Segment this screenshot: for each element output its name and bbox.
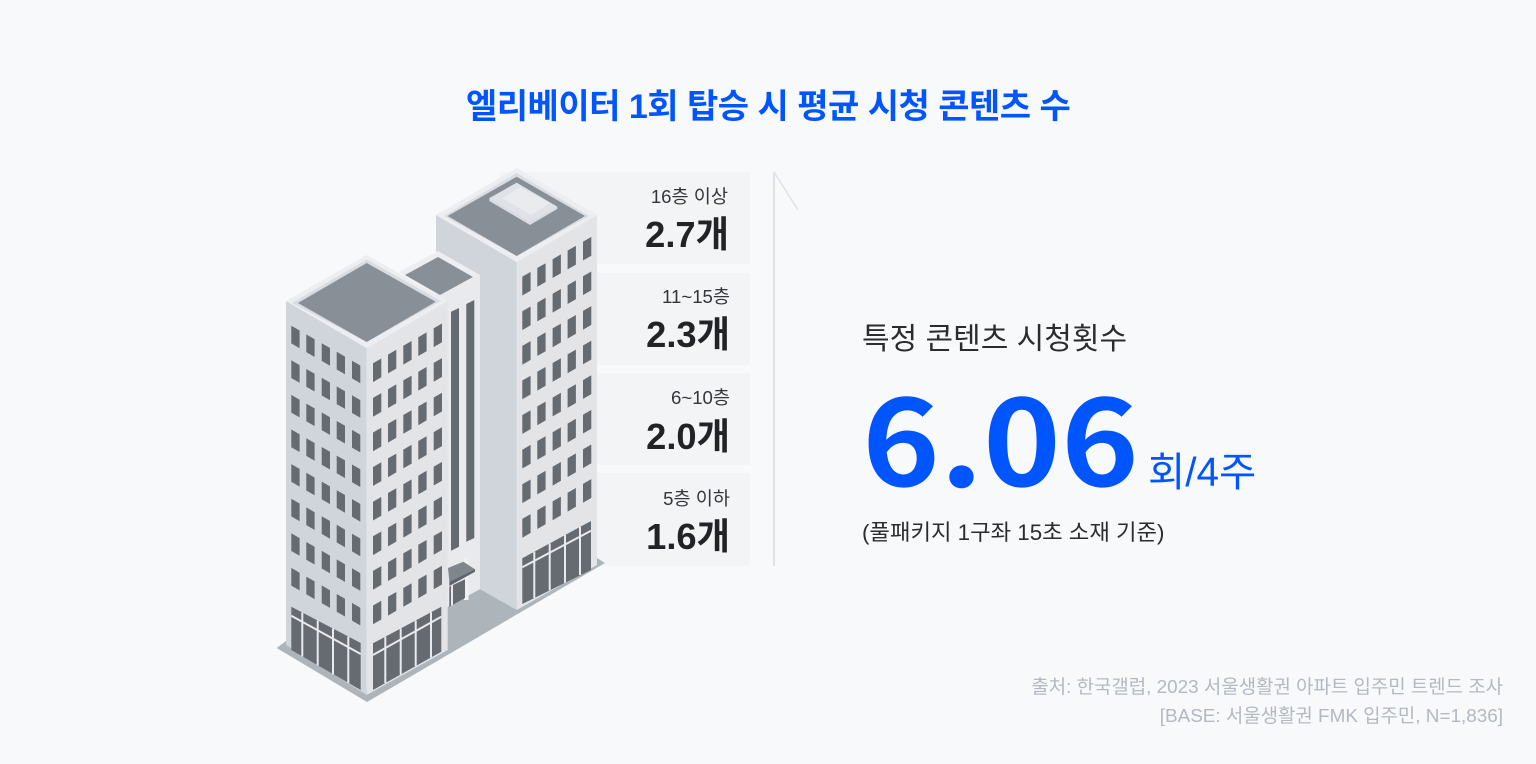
front building: [286, 255, 448, 695]
tower windows: [522, 237, 591, 538]
card value: 2.0개: 2.0개: [646, 416, 730, 457]
entrance canopy: [448, 558, 475, 607]
title: 엘리베이터 1회 탑승 시 평균 시청 콘텐츠 수: [466, 88, 1070, 126]
left storefront: [291, 607, 361, 690]
metric value: 6.06: [862, 348, 1139, 520]
card text: 5층 이하: 5층 이하: [663, 488, 730, 509]
card: 5층 이하: [500, 473, 750, 566]
connecting section: [399, 251, 480, 607]
rooftop unit: [489, 183, 557, 225]
right face windows: [373, 324, 442, 624]
ground: [277, 558, 605, 702]
metric note: (풀패키지 1구좌 15초 소재 기준): [862, 520, 1164, 545]
left face windows: [291, 326, 360, 625]
card: 6~10층: [500, 373, 750, 465]
card value: 2.3개: 2.3개: [646, 314, 730, 355]
card text: 6~10층: 6~10층: [671, 387, 730, 408]
vertical windows: [451, 300, 474, 551]
card value: 1.6개: 1.6개: [646, 516, 730, 557]
card: 16층 이상: [500, 172, 750, 264]
tower storefront: [522, 521, 591, 604]
metric label: 특정 콘텐츠 시청횟수: [862, 323, 1127, 356]
card: 11~15층: [500, 273, 750, 365]
source line 1: 출처: 한국갤럽, 2023 서울생활권 아파트 입주민 트렌드 조사: [1031, 677, 1503, 698]
right storefront: [373, 607, 441, 690]
card text: 16층 이상: 16층 이상: [651, 186, 728, 207]
tower: [436, 168, 597, 610]
courtyard: [448, 589, 517, 650]
source line 2: [BASE: 서울생활권 FMK 입주민, N=1,836]: [1160, 706, 1503, 727]
card value: 2.7개: 2.7개: [645, 214, 729, 255]
divider with diagonal: [774, 172, 798, 566]
card text: 11~15층: 11~15층: [662, 286, 730, 307]
metric unit: 회/4주: [1148, 449, 1256, 495]
